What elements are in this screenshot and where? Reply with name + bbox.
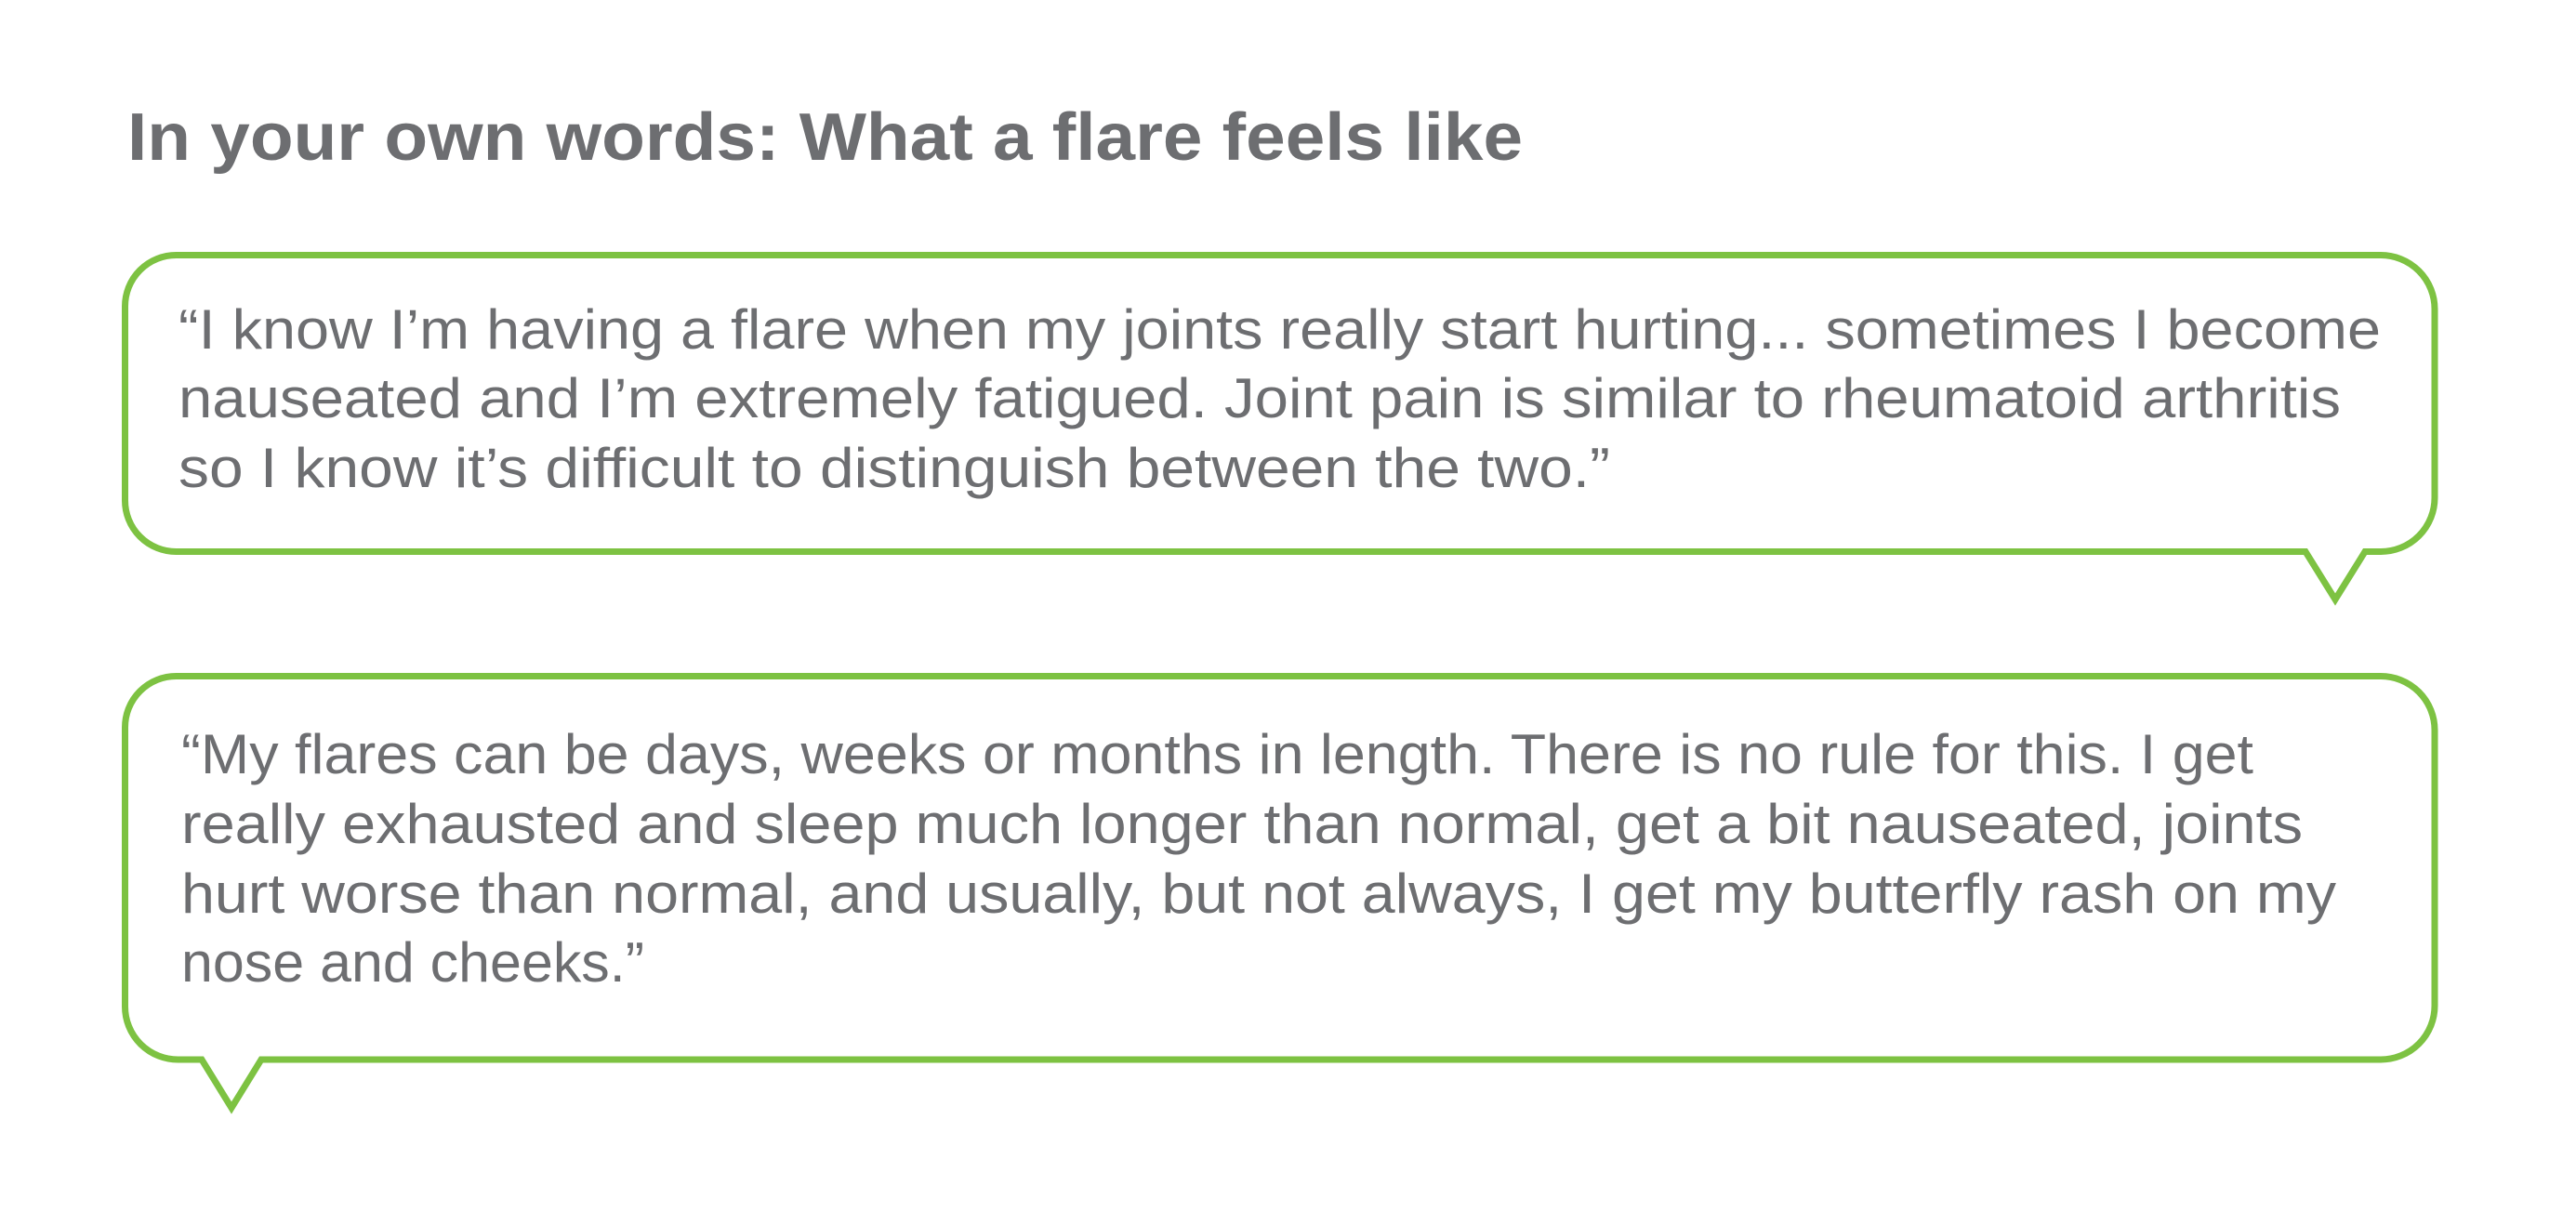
quote 1 text: so I know it’s difficult to distinguish between the two.”	[178, 437, 1610, 499]
quote 2 text	[181, 723, 2336, 994]
quote 2 text: “My flares can be days, weeks or months in length. There is no rule for this. I get	[181, 723, 2253, 785]
quote 1 text	[178, 298, 2381, 499]
title: In your own words: What a flare feels like	[127, 100, 1523, 175]
quote 2 text: really exhausted and sleep much longer than normal, get a bit nauseated, joints	[181, 793, 2303, 855]
quote 2 text: hurt worse than normal, and usually, but not always, I get my butterfly rash on my	[181, 863, 2336, 925]
panel: quote 1 speech bubble	[125, 255, 2435, 599]
quote 1 text: nauseated and I’m extremely fatigued. Joint pain is similar to rheumatoid arthritis	[178, 367, 2341, 429]
quote 1 text: “I know I’m having a flare when my joints really start hurting... sometimes I become	[178, 298, 2381, 361]
panel: quote 2 speech bubble	[125, 677, 2435, 1108]
quote 2 text: nose and cheeks.”	[181, 931, 644, 994]
